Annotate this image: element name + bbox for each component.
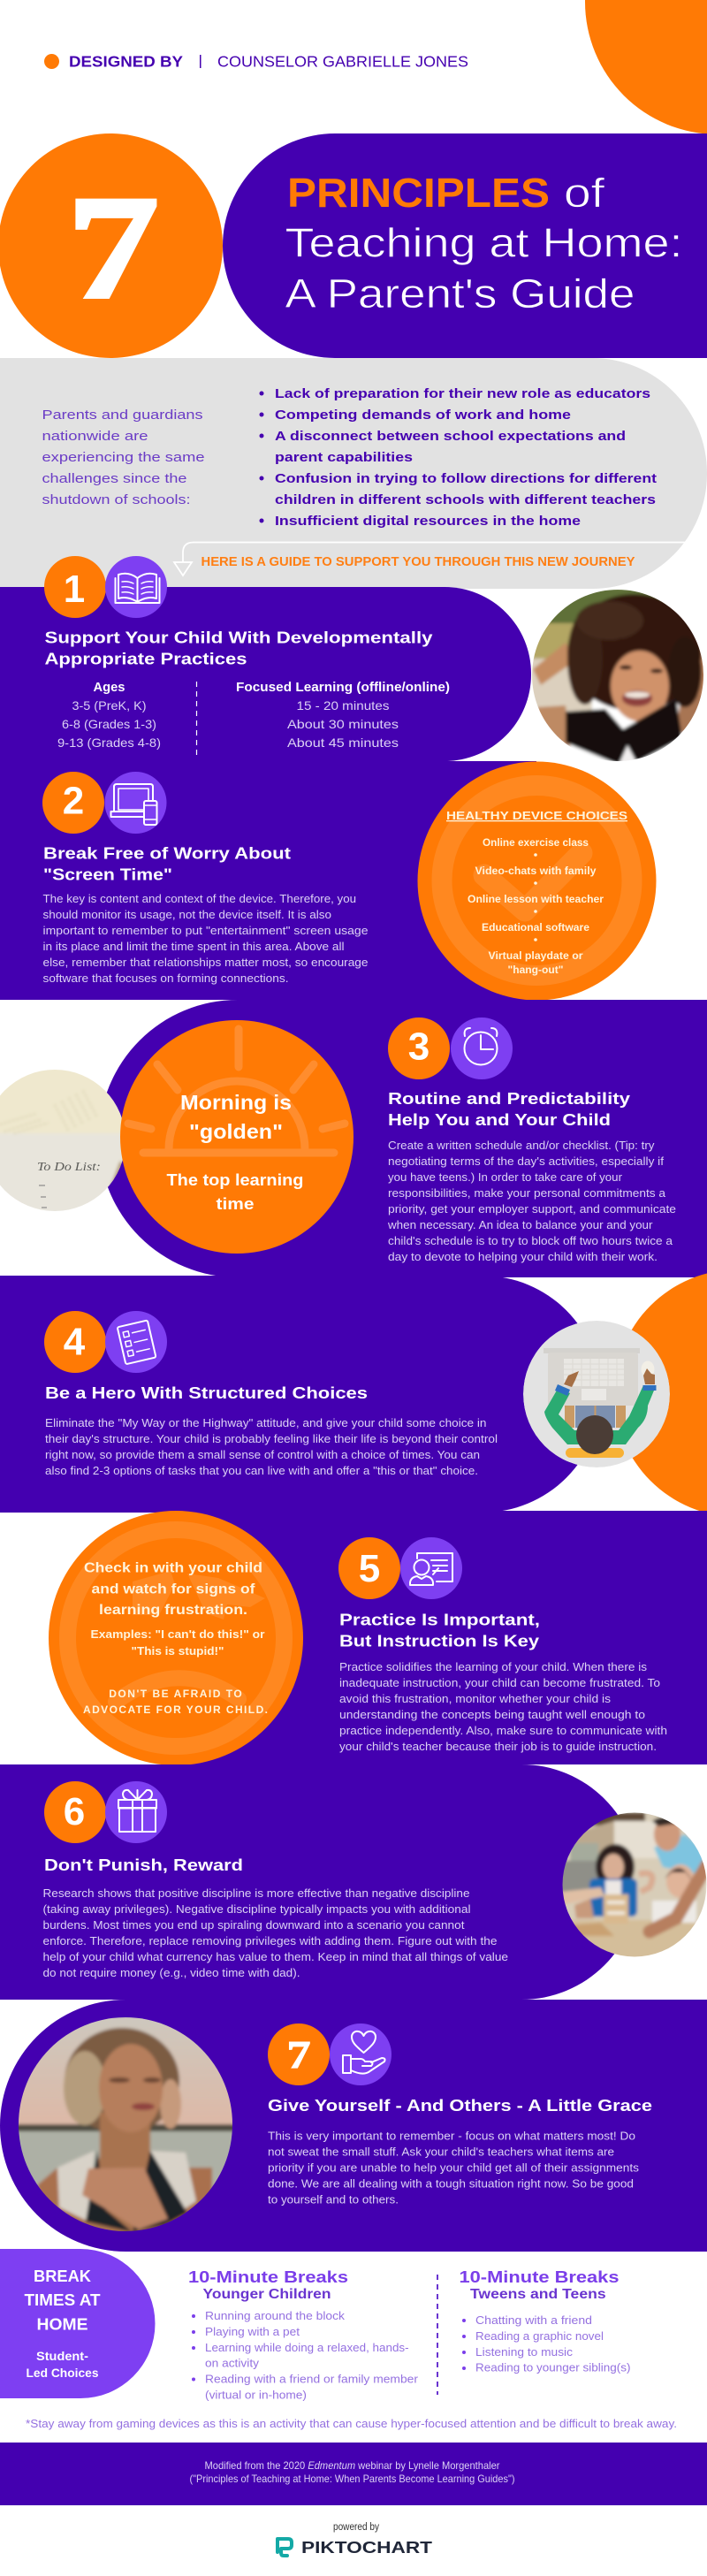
- callout: check in with your child: ADVOCATE FOR YOUR CHILD.: [83, 1703, 268, 1716]
- panel: principle 2: [0, 761, 536, 1000]
- column: breaks for younger children: Playing with a pet: [205, 2326, 300, 2338]
- icon: checklist: [118, 1320, 156, 1364]
- callout: healthy device choices: [417, 762, 656, 1001]
- body text: [42, 1887, 508, 1979]
- body text: your child's teacher because their job is to guide instruction.: [339, 1741, 657, 1753]
- body text: not sweat the small stuff. Ask your child's teachers what items are: [268, 2146, 614, 2159]
- body text: The key is content and context of the device. Therefore, you: [42, 893, 356, 905]
- intro text: shutdown of schools:: [42, 492, 191, 507]
- body text: should monitor its usage, not the device itself. It is also: [42, 909, 331, 921]
- badge 3: 3: [408, 1025, 430, 1068]
- panel: break times tab: Student-: [36, 2349, 88, 2363]
- callout: check in with your child: learning frustration.: [99, 1603, 247, 1618]
- table: ages and focused learning: 6-8 (Grades 1-3): [62, 717, 156, 731]
- footer credits: ("Principles of Teaching at Home: When Parents Become Learning Guides"): [189, 2473, 514, 2485]
- callout: healthy device choices: Online lesson with teacher: [468, 895, 604, 905]
- body text: avoid this frustration, monitor whether your child is: [339, 1693, 611, 1705]
- piktochart branding: powered by: [333, 2522, 379, 2533]
- heading: Don't Punish, Reward: [44, 1856, 243, 1874]
- big orange number seven: 7: [67, 166, 159, 330]
- challenges list: A disconnect between school expectations and: [275, 430, 626, 444]
- challenges list: children in different schools with different teachers: [275, 493, 656, 507]
- callout: check in with your child: DON'T BE AFRAID TO: [109, 1688, 242, 1700]
- table: ages and focused learning: About 30 minutes: [287, 717, 399, 731]
- callout: check in with your child: and watch for signs of: [92, 1582, 255, 1597]
- body text: [268, 2130, 639, 2206]
- table: ages and focused learning: About 45 minutes: [287, 735, 399, 750]
- body text: also find 2-3 options of tasks that you can live with and offer a "this or that" choice.: [45, 1465, 478, 1477]
- heading: Break Free of Worry About: [43, 843, 291, 863]
- column: breaks for younger children: 10-Minute Breaks: [188, 2267, 348, 2286]
- body text: you have teens.) In order to take care of your: [388, 1171, 622, 1184]
- header: designed by: [44, 53, 468, 71]
- column: breaks for younger children: (virtual or in-home): [205, 2389, 307, 2401]
- badge 7: 7: [286, 2033, 311, 2077]
- body text: Eliminate the "My Way or the Highway" attitude, and give your child some choice in: [45, 1417, 487, 1429]
- body text: (taking away privileges). Negative discipline typically impacts you with additional: [42, 1903, 470, 1916]
- body text: software that focuses on forming connections.: [42, 972, 288, 985]
- column: breaks for younger children: Running around the block: [205, 2310, 346, 2322]
- callout: healthy device choices: Educational software: [482, 923, 589, 934]
- header: designed by: COUNSELOR GABRIELLE JONES: [217, 53, 468, 71]
- badge 1: 1: [64, 568, 85, 611]
- body text: This is very important to remember - focus on what matters most! Do: [268, 2130, 635, 2143]
- callout: morning is golden: Morning is: [180, 1091, 292, 1114]
- body text: priority if you are unable to help your child get all of their assignments: [268, 2162, 639, 2175]
- body text: responsibilities, make your personal commitments a: [388, 1187, 665, 1200]
- table: ages and focused learning: [57, 681, 450, 757]
- heading: Routine and Predictability: [388, 1089, 631, 1108]
- panel: challenges intro: [0, 358, 707, 589]
- body text: when necessary. An idea to balance your and your: [387, 1219, 652, 1231]
- panel: break times tab: [0, 2249, 156, 2398]
- icon: gift: [118, 1790, 156, 1832]
- icon: heart in hand: [343, 2031, 385, 2074]
- icon: open book: [115, 574, 159, 603]
- body text: negotiating terms of the day's activities, especially if: [388, 1155, 665, 1168]
- callout: morning is golden: [120, 1020, 354, 1254]
- panel: principle 2: "Screen Time": [43, 865, 172, 884]
- intro text: challenges since the: [42, 471, 187, 486]
- body text: [42, 893, 369, 985]
- column: breaks for tweens and teens: Reading a graphic novel: [475, 2330, 604, 2343]
- challenges list: Confusion in trying to follow directions for different: [275, 472, 657, 486]
- laptop: [544, 1348, 640, 1406]
- panel: break times tab: BREAK: [34, 2267, 91, 2285]
- body text: to yourself and to others.: [268, 2194, 399, 2206]
- body text: inadequate instruction, your child can become frustrated. To: [339, 1677, 660, 1689]
- badge 5: 5: [359, 1547, 380, 1590]
- callout: check in with your child: [49, 1511, 303, 1765]
- guide callout: HERE IS A GUIDE TO SUPPORT YOU THROUGH THIS NEW JOURNEY: [201, 555, 635, 569]
- badge 5: [338, 1537, 462, 1599]
- table: ages and focused learning: Focused Learning (offline/online): [236, 681, 450, 695]
- panel: principle 4: [0, 1276, 601, 1513]
- panel: principle 7: [0, 2000, 707, 2252]
- panel: break times tab: TIMES AT: [25, 2291, 101, 2309]
- body text: Create a written schedule and/or checklist. (Tip: try: [388, 1139, 655, 1152]
- column: breaks for younger children: Younger Children: [203, 2287, 331, 2302]
- body text: child's schedule is to try to block off two hours twice a: [388, 1235, 673, 1247]
- callout: check in with your child: Examples: "I can't do this!" or: [90, 1627, 265, 1641]
- intro text: [42, 408, 205, 507]
- intro text: experiencing the same: [42, 450, 205, 465]
- heading: Practice Is Important,: [339, 1611, 540, 1628]
- footer credits: Modified from the 2020 Edmentum webinar by Lynelle Morgenthaler: [205, 2459, 500, 2472]
- panel: break times tab: HOME: [37, 2316, 88, 2334]
- body text: right now, so provide them a small sense of control with a choice of times. You can: [45, 1449, 480, 1461]
- footer credits: [0, 2443, 707, 2505]
- column: breaks for tweens and teens: 10-Minute Breaks: [460, 2267, 619, 2286]
- photo: family playing blocks: [562, 1812, 707, 1957]
- heading: Support Your Child With Developmentally: [44, 628, 433, 647]
- title panel: [223, 133, 707, 358]
- icon: sad face: [116, 1571, 265, 1702]
- challenges list: parent capabilities: [275, 451, 413, 465]
- photo: to do list: To Do List:: [37, 1161, 101, 1174]
- challenges list: Competing demands of work and home: [275, 408, 571, 423]
- badge 3: [388, 1017, 513, 1079]
- heading: Be a Hero With Structured Choices: [45, 1383, 368, 1402]
- footnote: *Stay away from gaming devices as this is an activity that can cause hyper-focused attention and be difficult to break away.: [26, 2418, 677, 2430]
- title panel: of: [564, 170, 604, 216]
- icon: sunrise: [128, 1029, 345, 1153]
- badge 4: [44, 1311, 167, 1373]
- body text: day to devote to helping your child with their work.: [388, 1251, 658, 1263]
- column: breaks for tweens and teens: Tweens and Teens: [470, 2287, 606, 2302]
- badge 4: 4: [64, 1321, 86, 1363]
- icon: alarm clock: [465, 1028, 497, 1064]
- callout: morning is golden: "golden": [189, 1120, 283, 1143]
- challenges list: Lack of preparation for their new role as educators: [275, 387, 650, 401]
- callout: healthy device choices: "hang-out": [507, 965, 564, 976]
- title panel: A Parent's Guide: [285, 271, 635, 316]
- piktochart branding: [277, 2522, 433, 2557]
- column: breaks for tweens and teens: Chatting with a friend: [475, 2314, 592, 2327]
- badge 2: 2: [63, 780, 84, 822]
- column: breaks for younger children: [188, 2267, 418, 2401]
- photo: to do list: [0, 1070, 123, 1211]
- callout: healthy device choices: Video-chats with family: [475, 866, 597, 877]
- icon: teacher at board: [410, 1553, 452, 1585]
- body text: Research shows that positive discipline is more effective than negative discipline: [42, 1887, 470, 1900]
- panel: principle 5: But Instruction Is Key: [339, 1632, 540, 1650]
- arrow: [174, 543, 686, 575]
- callout: morning is golden: time: [216, 1195, 255, 1213]
- big orange number seven: [0, 133, 223, 358]
- heading: Give Yourself - And Others - A Little Grace: [268, 2096, 652, 2115]
- body text: important to remember to put "entertainment" screen usage: [42, 925, 369, 937]
- photo: smiling child: [530, 588, 707, 765]
- column: breaks for younger children: Reading with a friend or family member: [205, 2373, 418, 2385]
- body text: [387, 1139, 676, 1263]
- callout: healthy device choices: Online exercise class: [483, 838, 589, 849]
- callout: check in with your child: "This is stupid!": [131, 1644, 224, 1658]
- intro text: Parents and guardians: [42, 408, 203, 423]
- column: breaks for tweens and teens: Reading to younger sibling(s): [475, 2362, 631, 2374]
- table: ages and focused learning: 3-5 (PreK, K): [72, 698, 147, 713]
- panel: principle 5: [49, 1511, 707, 1765]
- table: ages and focused learning: 9-13 (Grades 4-8): [57, 735, 161, 750]
- table: ages and focused learning: Ages: [94, 681, 125, 695]
- illustration: person at laptop: [523, 1321, 670, 1467]
- body text: in its place and limit the time spent in this area. Above all: [42, 941, 345, 953]
- header: designed by: DESIGNED BY: [69, 53, 183, 71]
- body text: priority, get your employer support, and communicate: [388, 1203, 676, 1216]
- panel: principle 3: [0, 1000, 707, 1277]
- panel: break times tab: Led Choices: [27, 2366, 99, 2380]
- decorative orange circle right of principle 4: [614, 1269, 707, 1517]
- icon: piktochart logo: [277, 2539, 292, 2556]
- panel: principle 6: [0, 1764, 639, 2000]
- column: breaks for tweens and teens: Listening to music: [475, 2346, 573, 2359]
- callout: healthy device choices: Virtual playdate or: [488, 951, 583, 962]
- icon: laptop and phone: [111, 784, 157, 825]
- challenges list: Insufficient digital resources in the home: [275, 514, 581, 529]
- body text: Practice solidifies the learning of your child. When there is: [339, 1661, 647, 1673]
- decorative orange circle top right: [585, 0, 707, 134]
- body text: help of your child what currency has value to them. Keep in mind that all things of value: [42, 1951, 508, 1963]
- panel: principle 1: [0, 556, 531, 761]
- badge 1: [44, 556, 167, 618]
- badge 6: [44, 1781, 167, 1843]
- callout: check in with your child: Check in with your child: [84, 1561, 262, 1575]
- piktochart branding: PIKTOCHART: [301, 2538, 433, 2557]
- title panel: PRINCIPLES: [287, 170, 550, 216]
- body text: their day's structure. Your child is probably feeling like their life is beyond their control: [45, 1433, 498, 1445]
- body text: [339, 1661, 667, 1753]
- body text: understanding the concepts being taught well enough to: [339, 1709, 645, 1721]
- callout: morning is golden: The top learning: [166, 1171, 304, 1189]
- body text: else, remember that relationships matter most, so encourage: [42, 956, 369, 969]
- photo: woman resting: [13, 2016, 239, 2237]
- body text: do not require money (e.g., video time with dad).: [42, 1967, 300, 1979]
- body text: burdens. Most times you end up spiraling downward into a scenario you cannot: [42, 1919, 465, 1932]
- table: ages and focused learning: 15 - 20 minutes: [297, 698, 389, 713]
- intro text: nationwide are: [42, 429, 148, 444]
- challenges list: [260, 387, 657, 529]
- body text: practice independently. Also, make sure to communicate with: [339, 1725, 667, 1737]
- callout: healthy device choices: HEALTHY DEVICE CHOICES: [446, 809, 627, 822]
- column: breaks for tweens and teens: [460, 2267, 631, 2374]
- title panel: Teaching at Home:: [285, 219, 682, 265]
- person: [544, 1361, 656, 1458]
- badge 7: [268, 2023, 392, 2085]
- column: breaks for younger children: Learning while doing a relaxed, hands-: [205, 2342, 409, 2354]
- body text: enforce. Therefore, replace removing privileges with adding them. Figure out with the: [42, 1935, 498, 1947]
- panel: principle 3: Help You and Your Child: [388, 1110, 611, 1129]
- body text: [45, 1417, 498, 1477]
- badge 6: 6: [64, 1790, 85, 1833]
- badge 2: [42, 772, 166, 834]
- body text: done. We are all dealing with a tough situation right now. So be good: [268, 2178, 634, 2191]
- panel: principle 1: Appropriate Practices: [44, 649, 247, 668]
- column: breaks for younger children: on activity: [205, 2357, 260, 2369]
